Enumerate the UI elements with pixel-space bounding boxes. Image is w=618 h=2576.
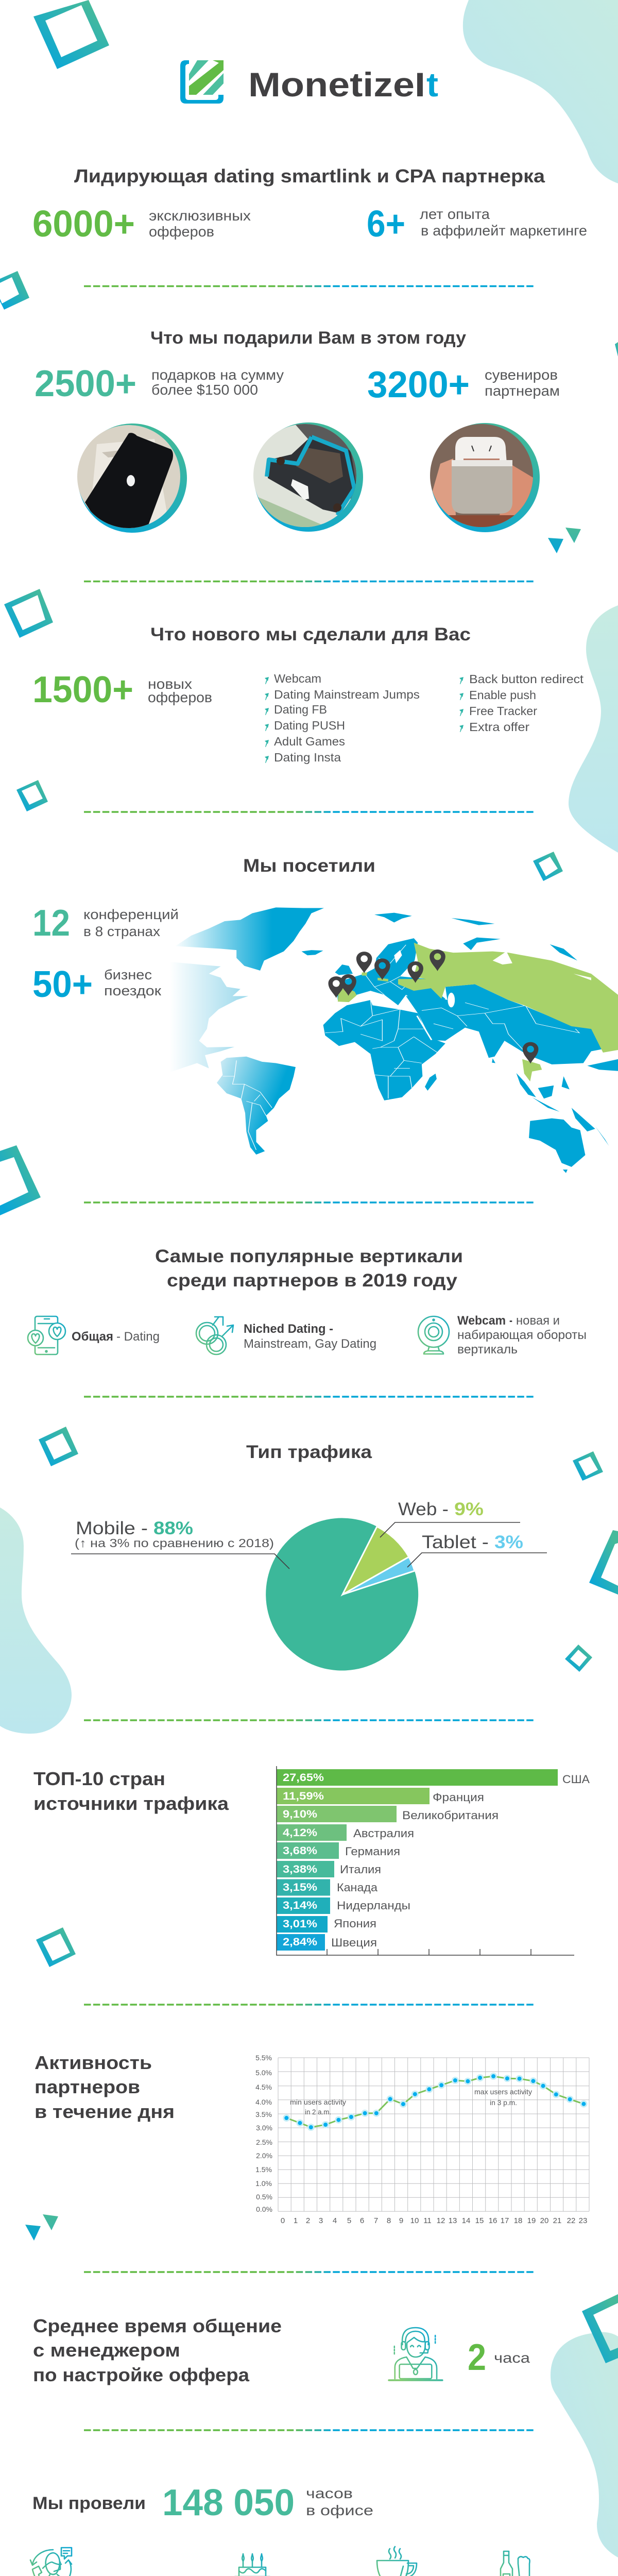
world map with pins	[169, 907, 618, 1173]
icon: webcam	[418, 1316, 449, 1354]
list: tools: Back button redirect	[469, 672, 584, 686]
heading: partner activity: партнеров	[35, 2076, 140, 2097]
map: South America	[217, 1057, 296, 1155]
text: webcam vertical: -	[509, 1314, 512, 1328]
section: what's new	[32, 624, 584, 764]
stat: 3200+ souvenirs: 3200+	[367, 364, 470, 405]
text: webcam vertical: Webcam	[457, 1314, 506, 1328]
line chart: min users activity	[290, 2098, 346, 2106]
line chart: 1	[294, 2216, 298, 2225]
bar chart: 3,14%	[283, 1900, 317, 1911]
callout: mobile	[71, 1518, 289, 1569]
stat: 1500+ offers	[32, 669, 212, 710]
bar chart: Германия	[345, 1845, 400, 1858]
stat: 50+ trips: 50+	[32, 964, 93, 1005]
bar chart	[277, 1766, 590, 1955]
callout: tablet	[407, 1532, 547, 1567]
map: Greenland	[176, 907, 324, 971]
bar chart: 9,10%	[283, 1808, 317, 1820]
stat: 6+ years: лет опыта	[420, 206, 490, 222]
icon: birthday cake	[233, 2554, 272, 2576]
stat: 2500+ gifts	[35, 363, 284, 404]
bar chart: 4,12%	[283, 1827, 317, 1839]
stat: 6000+ offers: офферов	[149, 224, 214, 240]
line chart: 21	[553, 2216, 561, 2225]
list: tools: Extra offer	[469, 720, 529, 734]
heading: popular verticals: Самые популярные вертикали	[155, 1246, 463, 1266]
line chart: 2.0%	[256, 2151, 272, 2160]
line chart: 10	[410, 2216, 419, 2225]
stat: 12 conferences	[32, 903, 179, 944]
icon: coffee cup	[377, 2547, 417, 2576]
icon: gender symbols	[196, 1317, 233, 1354]
stat: 1500+ offers: 1500+	[32, 669, 133, 710]
stat: 2 hours: 2	[468, 2337, 486, 2378]
list: offer types: Dating Mainstream Jumps	[274, 688, 420, 701]
section: top-10 countries	[33, 1766, 590, 1955]
list: tools: Enable push	[469, 688, 536, 702]
heading: popular verticals	[155, 1246, 463, 1291]
line chart: 20	[540, 2216, 548, 2225]
stat: 1500+ offers: новых	[148, 676, 192, 692]
logo wordmark: MonetizeI	[248, 65, 425, 104]
callout: tablet: Tablet -	[422, 1532, 489, 1552]
bar chart: Италия	[340, 1863, 381, 1876]
icon: support agent	[389, 2328, 442, 2380]
heading: manager time: Среднее время общение	[33, 2315, 282, 2336]
line chart: 9	[399, 2216, 403, 2225]
callout: mobile: 88%	[153, 1518, 193, 1538]
line chart: 15	[475, 2216, 484, 2225]
heading: popular verticals: среди партнеров в 2019 году	[167, 1270, 458, 1291]
section: gifts	[35, 328, 560, 536]
line chart: 7	[374, 2216, 378, 2225]
stat: 3200+ souvenirs: партнерам	[485, 383, 560, 399]
heading: manager time: с менеджером	[33, 2340, 180, 2361]
bar chart: 27,65%	[283, 1772, 324, 1784]
line chart: 3.5%	[255, 2110, 272, 2119]
bar chart: Япония	[334, 1917, 376, 1930]
list: tools: Free Tracker	[469, 704, 537, 718]
decor: background blob right middle	[569, 605, 618, 853]
text: webcam vertical: набирающая обороты	[457, 1328, 587, 1342]
bar chart: Франция	[433, 1791, 484, 1804]
section: header and logo	[32, 60, 587, 245]
photo: robot vacuum	[252, 422, 363, 532]
icon: MonetizeIt logo	[180, 60, 224, 104]
heading: top-10 countries: источники трафика	[33, 1793, 229, 1814]
section: partner activity	[35, 2052, 589, 2225]
decor: background blob top right	[463, 0, 618, 183]
line chart: 17	[501, 2216, 509, 2225]
line chart: 19	[527, 2216, 536, 2225]
stat: 2500+ gifts: подарков на сумму	[151, 367, 284, 383]
section: manager time	[33, 2315, 530, 2385]
callout: mobile: (↑ на 3% по сравнению с 2018)	[75, 1536, 274, 1550]
bar chart: Швеция	[331, 1936, 377, 1949]
callout: web: 9%	[454, 1499, 484, 1519]
stat: 2500+ gifts: 2500+	[35, 363, 136, 404]
map: Africa	[323, 1000, 445, 1100]
line chart: in 2 a.m.	[305, 2108, 331, 2116]
heading: manager time: по настройке оффера	[33, 2364, 250, 2385]
heading: top-10 countries: ТОП-10 стран	[33, 1768, 165, 1789]
map: Europe	[337, 938, 445, 1005]
line chart: 5	[347, 2216, 351, 2225]
map: Asia	[406, 984, 605, 1064]
photo: AirPods	[430, 422, 540, 536]
icon: beer	[501, 2551, 530, 2576]
section: visited	[32, 856, 618, 1173]
section: office stats	[30, 2482, 583, 2576]
callout: web	[380, 1499, 520, 1537]
stat: 12 conferences: конференций	[83, 907, 179, 922]
decor: background blob left traffic	[0, 1507, 72, 1734]
map: North America	[169, 962, 248, 1072]
text: general dating: - Dating	[116, 1330, 160, 1344]
list: offer types	[265, 672, 420, 764]
line chart: 1.5%	[255, 2165, 272, 2174]
line chart: 6	[360, 2216, 364, 2225]
stat: 6000+ offers: эксклюзивных	[149, 208, 251, 224]
heading: hours in the office	[32, 2482, 373, 2523]
callout: mobile: Mobile -	[76, 1518, 148, 1538]
line chart: 22	[567, 2216, 575, 2225]
text: general dating	[72, 1330, 160, 1344]
bar chart: 3,68%	[283, 1845, 317, 1857]
stat: 6+ years	[367, 204, 587, 245]
line chart: 3.0%	[256, 2124, 272, 2132]
line chart: 14	[462, 2216, 470, 2225]
map pins	[328, 950, 538, 1063]
text: niched dating	[244, 1322, 376, 1351]
list: offer types: Webcam	[274, 672, 321, 685]
photo: iPhone	[77, 423, 187, 533]
line chart: 8	[387, 2216, 391, 2225]
bar chart: Австралия	[353, 1827, 414, 1840]
list: offer types: Dating Insta	[274, 751, 341, 764]
stat: 6+ years: 6+	[367, 204, 405, 245]
stat: 3200+ souvenirs	[367, 364, 560, 405]
stat: 6000+ offers: 6000+	[32, 204, 135, 245]
list: tools	[459, 672, 584, 734]
text: webcam vertical: новая и	[516, 1314, 560, 1328]
decor: triangles	[25, 528, 581, 2241]
line chart: 13	[449, 2216, 457, 2225]
line chart: 0.0%	[256, 2205, 272, 2213]
heading: hours in the office: Мы провели	[32, 2494, 146, 2513]
bar chart: США	[562, 1773, 590, 1786]
bar chart: Канада	[337, 1881, 378, 1894]
logo wordmark: t	[426, 65, 438, 104]
text: webcam vertical	[457, 1314, 587, 1357]
line chart: 16	[489, 2216, 497, 2225]
bar chart: Великобритания	[402, 1809, 499, 1822]
stat: 6+ years: в аффилейт маркетинге	[421, 223, 587, 239]
bar chart: 3,15%	[283, 1882, 317, 1893]
line chart: 23	[579, 2216, 587, 2225]
decor: background blob right lower	[551, 2332, 618, 2557]
heading: top-10 countries	[33, 1768, 229, 1814]
heading: hours in the office: часов	[306, 2485, 353, 2501]
text: niched dating: Niched Dating -	[244, 1322, 333, 1336]
line chart: 0	[281, 2216, 285, 2225]
line chart: 18	[514, 2216, 522, 2225]
list: offer types: Dating PUSH	[274, 719, 345, 732]
heading: manager time	[33, 2315, 282, 2385]
stat: 6000+ offers	[32, 204, 251, 245]
stat: 1500+ offers: офферов	[148, 689, 212, 705]
line chart: 5.0%	[255, 2069, 272, 2077]
heading: visited: Мы посетили	[243, 856, 375, 876]
stat: 2 hours	[468, 2337, 530, 2378]
line chart: 4.0%	[255, 2098, 272, 2106]
icon: call center	[30, 2548, 72, 2576]
heading: gifts: Что мы подарили Вам в этом году	[150, 328, 466, 348]
heading: partner activity: Активность	[35, 2052, 152, 2073]
line chart	[255, 2054, 589, 2225]
line chart: 5.5%	[255, 2054, 272, 2062]
heading: partner activity: в течение дня	[35, 2101, 175, 2122]
callout: web: Web -	[398, 1499, 449, 1519]
line chart: 1.0%	[255, 2179, 272, 2188]
stat: 12 conferences: 12	[32, 903, 70, 944]
heading: what's new: Что нового мы сделали для Вас	[150, 624, 471, 645]
line chart: 4	[333, 2216, 337, 2225]
line chart: max users activity	[474, 2088, 532, 2096]
stat: 2500+ gifts: более $150 000	[151, 382, 258, 398]
bar chart: 2,84%	[283, 1936, 317, 1948]
text: niched dating: Mainstream, Gay Dating	[244, 1337, 376, 1351]
line chart: 12	[437, 2216, 445, 2225]
bar chart: Нидерланды	[337, 1899, 410, 1912]
line chart: 11	[423, 2216, 432, 2225]
stat: 50+ trips: бизнес	[104, 967, 152, 982]
text: webcam vertical: вертикаль	[457, 1343, 518, 1357]
icon: phone with hearts	[28, 1316, 65, 1354]
bar chart: 3,38%	[283, 1863, 317, 1875]
bar chart: 3,01%	[283, 1918, 317, 1930]
pie chart	[266, 1518, 418, 1671]
heading: leading partner: Лидирующая dating smartlink и CPA партнерка	[74, 165, 545, 187]
stat: 3200+ souvenirs: сувениров	[485, 367, 558, 383]
heading: hours in the office: 148 050	[162, 2482, 295, 2523]
stat: 12 conferences: в 8 странах	[83, 924, 161, 939]
section: traffic type	[71, 1442, 547, 1671]
heading: partner activity	[35, 2052, 175, 2122]
stat: 50+ trips: поездок	[104, 983, 161, 998]
line chart: in 3 p.m.	[490, 2098, 517, 2107]
section: popular verticals	[28, 1246, 587, 1357]
stat: 2 hours: часа	[494, 2350, 530, 2366]
heading: hours in the office: в офисе	[306, 2502, 373, 2518]
line chart: 2.5%	[256, 2138, 272, 2146]
bar chart: 11,59%	[283, 1790, 324, 1802]
map: highlighted countries	[338, 972, 542, 1081]
line chart: 2	[306, 2216, 310, 2225]
list: offer types: Dating FB	[274, 703, 327, 716]
text: general dating: Общая	[72, 1330, 113, 1344]
map: islands and Australia	[301, 913, 618, 1173]
line chart: 0.5%	[256, 2193, 272, 2201]
callout: tablet: 3%	[494, 1532, 523, 1552]
list: offer types: Adult Games	[274, 735, 345, 748]
stat: 50+ trips	[32, 964, 161, 1005]
line chart: 3	[319, 2216, 323, 2225]
line chart: 4.5%	[255, 2083, 272, 2091]
heading: traffic type: Тип трафика	[246, 1442, 372, 1462]
map: Russia highlighted	[414, 943, 618, 1053]
